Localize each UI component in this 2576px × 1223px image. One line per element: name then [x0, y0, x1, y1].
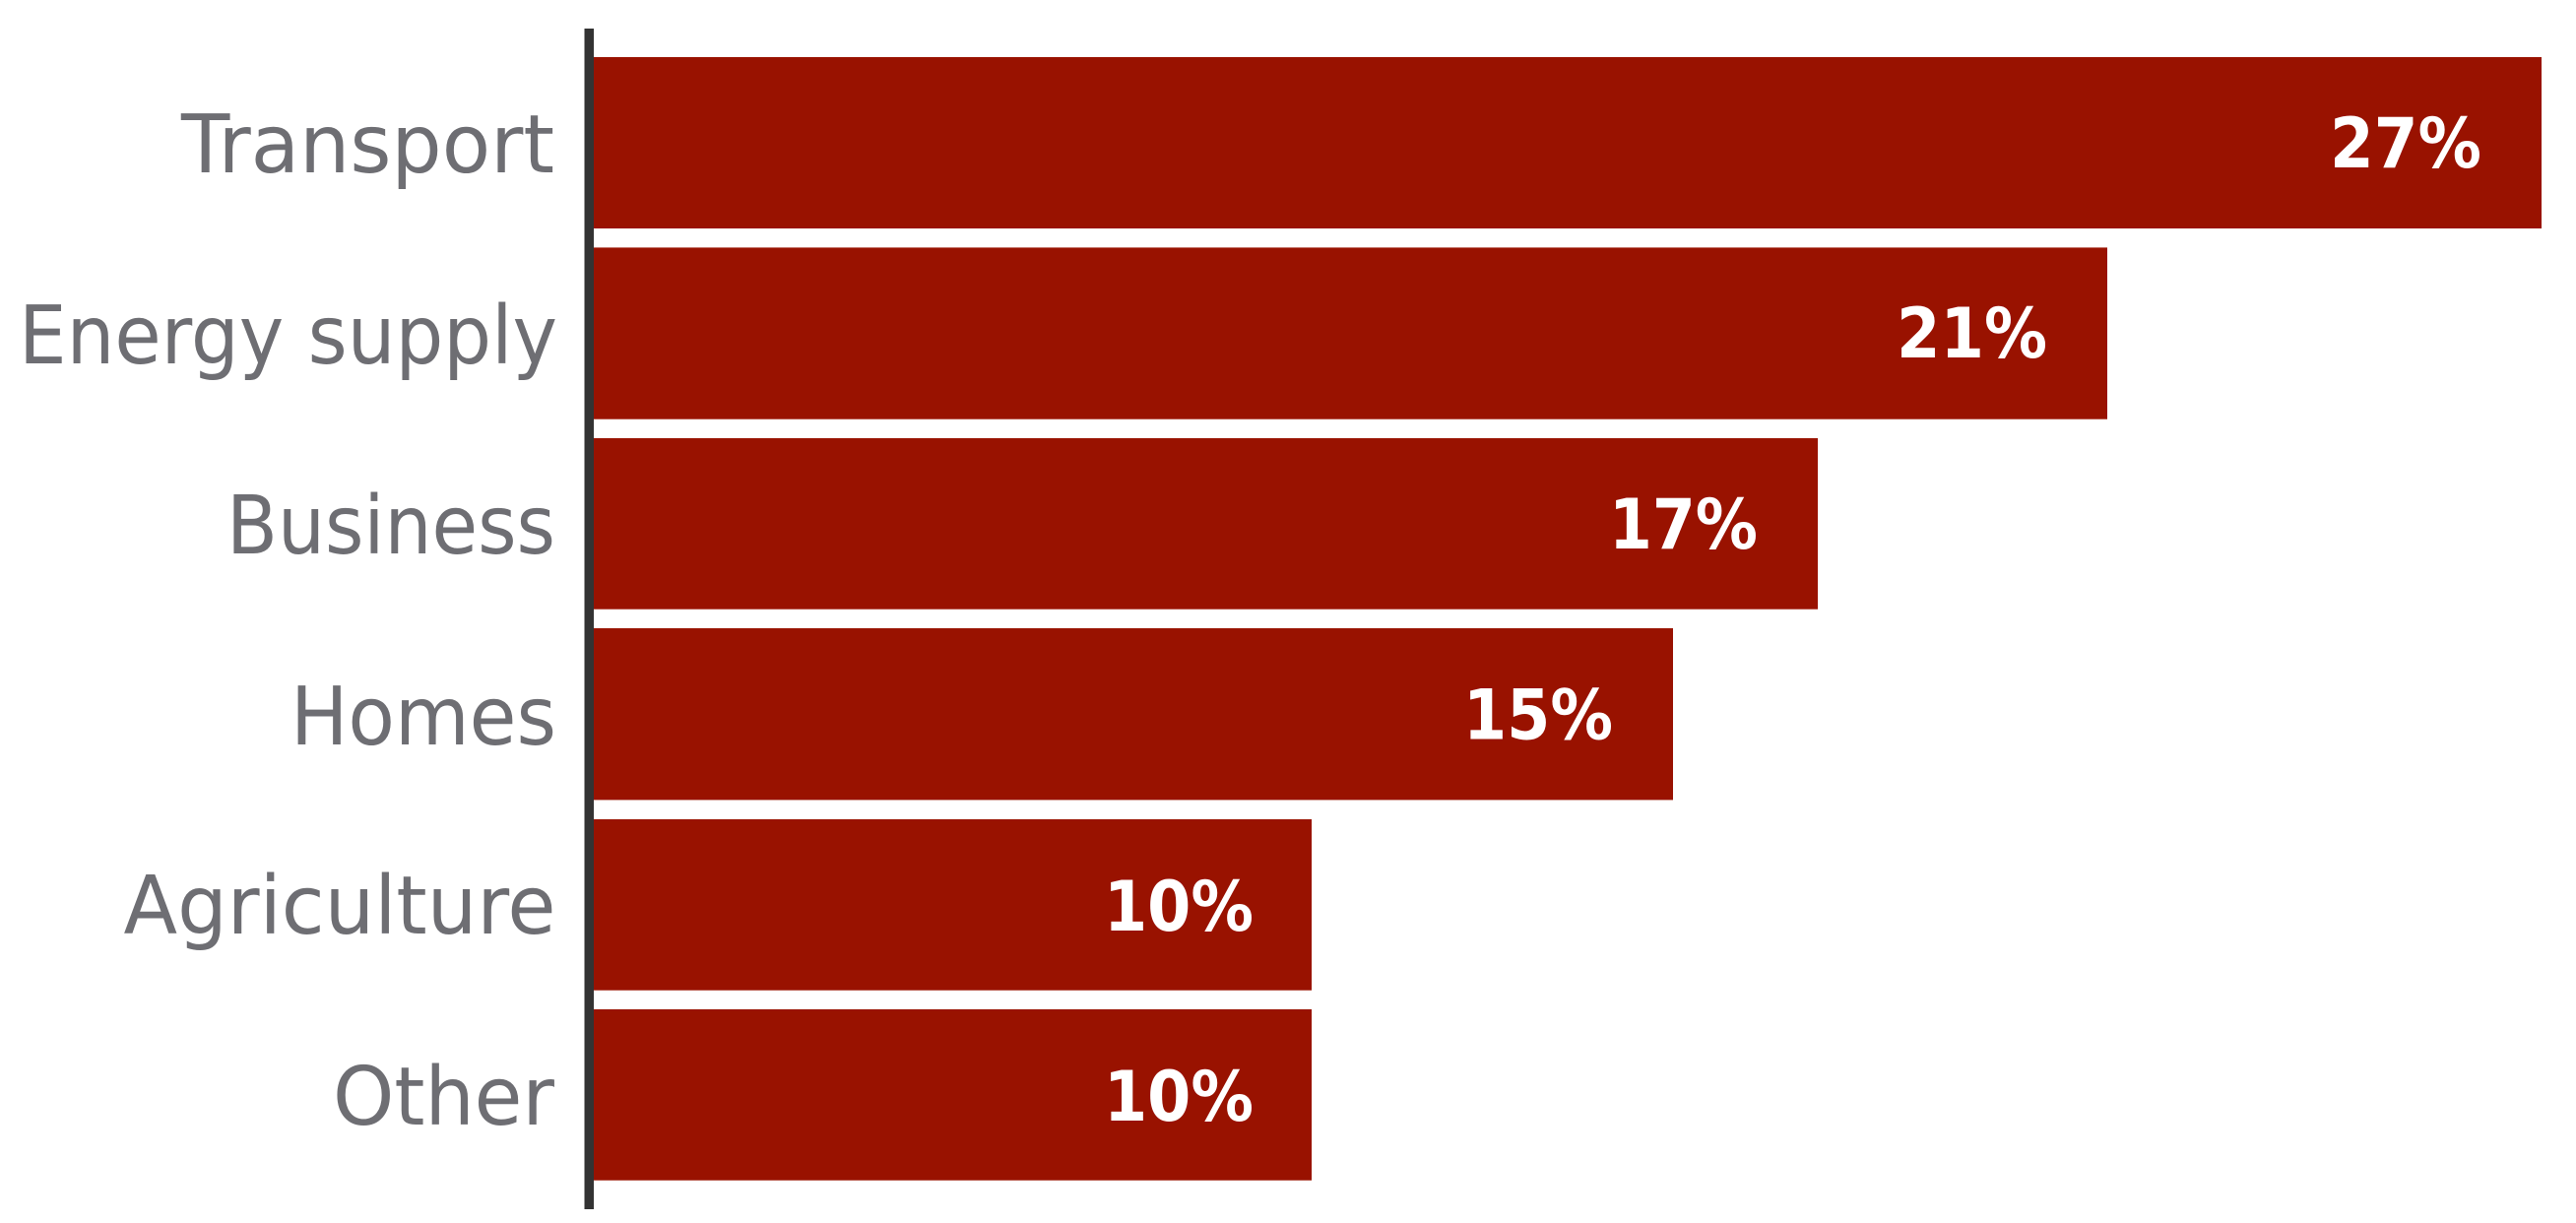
row: Agriculture 10%: Agriculture — [124, 860, 555, 953]
row: Other 10%: 10% — [1104, 1057, 1254, 1137]
row: Agriculture 10%: 10% — [1104, 867, 1254, 947]
row: Energy supply 21%: Energy supply — [19, 290, 557, 383]
row: Other 10%: Other — [333, 1051, 554, 1144]
row: Business 17%: 17% — [1609, 484, 1758, 565]
row: Homes 15%: Homes — [290, 671, 556, 764]
vertical axis line — [585, 29, 594, 1209]
row: Homes 15%: 15% — [1463, 676, 1613, 756]
row: Energy supply 21% — [19, 247, 2107, 419]
row: Business 17% — [226, 438, 1818, 610]
row: Transport 27%: Transport — [180, 98, 554, 192]
row: Transport 27% — [180, 57, 2542, 228]
row: Agriculture 10% — [124, 819, 1312, 991]
row: Transport 27%: 27% — [2330, 103, 2481, 184]
row: Homes 15% — [290, 628, 1673, 800]
row: Business 17%: Business — [226, 480, 555, 573]
row: Other 10% — [333, 1009, 1312, 1181]
row: Energy supply 21%: 21% — [1897, 293, 2047, 374]
